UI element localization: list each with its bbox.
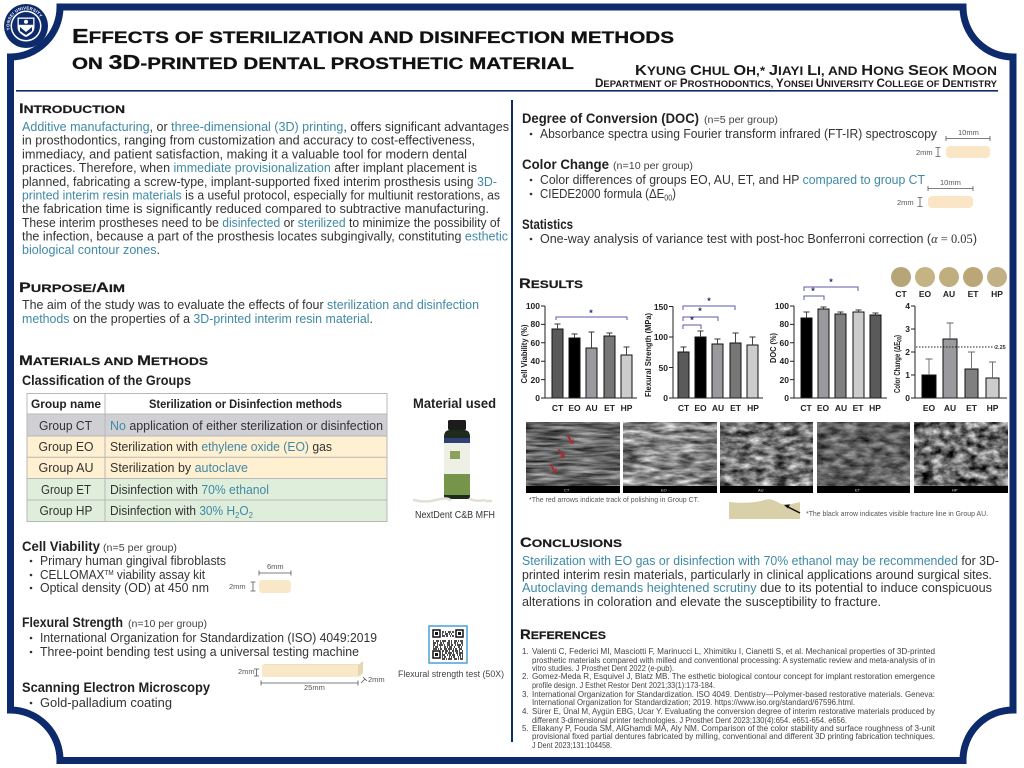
diagram: bar specimen 25mm: 2mm xyxy=(238,667,255,676)
text block: introduction: Additive manufacturing, or three-dimensional (3D) printing, offers significant advantages xyxy=(22,119,509,134)
bullet list: cell viability xyxy=(30,553,226,595)
bar chart: color change: EO xyxy=(923,403,936,413)
bullet list: flexural strength: Three-point bending test using a universal testing machine xyxy=(40,644,359,659)
text block: conclusions xyxy=(522,553,999,609)
panel: color change xyxy=(522,157,973,208)
SEM image: HP xyxy=(914,422,1008,493)
table: groups: Disinfection with 30% H xyxy=(110,503,238,518)
heading: DOC: Degree of Conversion (DOC) xyxy=(522,111,699,126)
sample size: cell viability: (n=5 per group) xyxy=(103,543,177,554)
reference list: Sürer E, Ünal M, Aygün EBG, Ucar Y. Evaluating the conversion degree of interim restorative materials produced by xyxy=(532,707,935,716)
bar chart: degree of conversion: * xyxy=(829,277,833,287)
bar chart: color change: 2 xyxy=(905,347,910,357)
diagram: disc specimen 10mm: 2mm xyxy=(897,198,914,207)
affiliation: DEPARTMENT OF PROSTHODONTICS, YONSEI UNIVERSITY COLLEGE OF DENTISTRY xyxy=(595,78,998,90)
logo: Yonsei University seal: YONSEI UNIVERSITY xyxy=(6,6,42,30)
bar chart: cell viability: AU xyxy=(585,403,598,413)
bar chart: degree of conversion: 60 xyxy=(780,338,789,348)
bar chart: cell viability xyxy=(519,301,637,413)
heading: purpose/aim: PURPOSE/ A IM xyxy=(19,280,125,295)
table: groups: Group AU xyxy=(38,460,94,475)
icon: resin bottle xyxy=(414,420,491,502)
reference list: 2. xyxy=(522,672,529,681)
bullet: SEM: Gold-palladium coating xyxy=(40,695,172,710)
bar chart: color change xyxy=(892,301,1007,413)
diagram: bar specimen 25mm: 25mm xyxy=(304,683,325,692)
bullet list: flexural strength xyxy=(30,630,377,659)
text block: conclusions: alterations in coloration and elevate the susceptibility to fracture. xyxy=(522,594,881,609)
SEM image: ET: ET xyxy=(855,488,861,492)
bar chart: flexural strength: 0 xyxy=(663,393,668,403)
bar chart: cell viability: HP xyxy=(621,403,633,413)
bar chart: flexural strength: HP xyxy=(747,403,759,413)
bar chart: color change: 00 xyxy=(898,337,904,342)
bar chart: degree of conversion: HP xyxy=(869,403,881,413)
bar chart: degree of conversion: 80 xyxy=(780,319,789,329)
color swatches: HP xyxy=(991,289,1003,299)
table: groups: No application of either sterilization or disinfection xyxy=(110,418,383,433)
bar chart: degree of conversion: * xyxy=(811,286,815,296)
bullet list: color change: CIEDE2000 formula (ΔE xyxy=(540,186,681,201)
bar chart: degree of conversion: ET xyxy=(853,403,864,413)
text block: introduction: in prosthodontics, ranging from customization and accuracy to cost-effectiveness, xyxy=(22,133,475,148)
bar chart: degree of conversion: 0 xyxy=(784,393,789,403)
text block: introduction: These interim prostheses need to be disinfected or sterilized to minimize the possibility of xyxy=(22,215,500,230)
bar chart: degree of conversion xyxy=(768,277,887,413)
bullet list: cell viability: CELLOMAX xyxy=(40,567,111,582)
bullet: statistics: One-way analysis of variance test with post-hoc Bonferroni correction (α = 0.05) xyxy=(540,231,977,246)
sample size: flexural strength: (n=10 per group) xyxy=(128,619,207,630)
reference list: provisional fixed partial dentures fabricated by milling, conventional and different 3D printing fabrication techniques. xyxy=(532,732,935,741)
table: groups: 2 xyxy=(235,510,240,520)
bar chart: flexural strength: AU xyxy=(712,403,724,413)
text block: introduction: planned, fabricating a screw-type, implant-supported fixed interim prosthesis using 3D- xyxy=(22,174,497,189)
bar chart: flexural strength: 50 xyxy=(659,363,668,373)
table: groups: Group CT xyxy=(39,418,92,433)
bar chart: cell viability: Cell Viability (%) xyxy=(519,324,529,384)
SEM image: CT xyxy=(526,422,620,493)
text block: introduction: immediacy, and patient satisfaction, making it a valuable tool for modern dental xyxy=(22,146,467,161)
bullet list: flexural strength: International Organization for Standardization (ISO) 4049:2019 xyxy=(40,630,377,645)
reference list: profile design. J Esthet Restor Dent 2021;33(1):173-184. xyxy=(532,681,715,690)
bar chart: color change: 0 xyxy=(905,393,910,403)
bar chart: flexural strength: EO xyxy=(694,403,707,413)
bar chart: flexural strength xyxy=(643,296,763,413)
SEM image: EO: EO xyxy=(661,488,667,492)
panel: references xyxy=(520,627,936,750)
bar chart: flexural strength: ET xyxy=(730,403,742,413)
bar chart: cell viability: EO xyxy=(568,403,581,413)
bar chart: flexural strength: 100 xyxy=(654,332,668,342)
heading: cell viability: Cell Viability xyxy=(22,539,100,554)
text block: purpose xyxy=(22,297,479,326)
reference list: J Dent 2023;131:104458. xyxy=(532,741,612,750)
title: ON 3D -PRINTED DENTAL PROSTHETIC MATERIAL xyxy=(72,51,574,74)
panel: statistics xyxy=(522,217,977,246)
bar chart: degree of conversion: 100 xyxy=(775,301,789,311)
reference list xyxy=(522,647,936,750)
heading: color change: Color Change xyxy=(522,157,609,172)
logo: Yonsei University seal xyxy=(4,4,48,48)
text block: conclusions: Sterilization with EO gas or disinfection with 70% ethanol may be recommended for 3D- xyxy=(522,553,999,568)
table: groups: Disinfection with 70% ethanol xyxy=(110,482,269,497)
text block: conclusions: printed interim resin materials, particularly in clinical applications around surgical sites. xyxy=(522,567,992,582)
diagram: bar specimen 25mm: 2mm xyxy=(368,675,385,684)
bar chart: flexural strength: * xyxy=(707,296,711,306)
subheading: classification: Classification of the Groups xyxy=(22,373,191,388)
bar chart: color change: 3 xyxy=(905,324,910,334)
reference list: vitro studies. J Prosthet Dent 2022 (e-pub). xyxy=(532,664,674,673)
bar chart: flexural strength: CT xyxy=(678,403,690,413)
bar chart: cell viability: 20 xyxy=(531,375,540,385)
text block: introduction xyxy=(22,119,509,257)
heading: statistics: Statistics xyxy=(522,217,573,232)
bar chart: color change: 2.25 xyxy=(995,345,1006,351)
bullet list: color change xyxy=(530,172,925,202)
table: groups: Group HP xyxy=(40,503,92,518)
bar chart: cell viability: 40 xyxy=(531,356,540,366)
diagram: disc specimen 6mm: 2mm xyxy=(229,582,246,591)
bar chart: cell viability: 80 xyxy=(531,319,540,329)
text block: purpose: The aim of the study was to evaluate the effects of four sterilization and disinfection xyxy=(22,297,479,312)
bar chart: cell viability: 100 xyxy=(526,301,540,311)
bullet list: cell viability: viability assay kit xyxy=(114,567,205,582)
reference list: International Organization for Standardization; 2019. https://www.iso.org/standard/67596.html. xyxy=(532,698,855,707)
table: groups: Sterilization or Disinfection methods xyxy=(149,397,342,411)
panel: purpose xyxy=(19,280,479,326)
SEM image: ET xyxy=(817,422,910,493)
reference list: 5. xyxy=(522,724,529,733)
table: groups: Group ET xyxy=(41,482,91,497)
bullet list: cell viability: Optical density (OD) at 450 nm xyxy=(40,580,209,595)
bar chart: color change: 4 xyxy=(905,301,910,311)
panel: flexural strength xyxy=(22,615,504,692)
text block: introduction: the infection, because a part of the prosthesis locates subgingivally, constituting esthetic xyxy=(22,228,508,244)
panel: scanning electron microscopy xyxy=(22,680,210,710)
bullet list: cell viability: Primary human gingival fibroblasts xyxy=(40,553,226,568)
text block: purpose: methods on the properties of a 3D-printed interim resin material. xyxy=(22,311,373,326)
diagram: disc specimen 10mm: 2mm xyxy=(916,148,933,157)
bar chart: flexural strength: 150 xyxy=(654,302,668,312)
bar chart: degree of conversion: DOC (%) xyxy=(768,333,778,363)
text block: introduction: practices. Therefore, when immediate provisionalization after implant placement is xyxy=(22,160,477,175)
bar chart: flexural strength: Flexural Strength (MPa) xyxy=(643,313,653,397)
bullet list: cell viability: TM xyxy=(104,570,114,577)
SEM image: EO xyxy=(623,422,717,493)
authors: KYUNG CHUL OH,* JIAYI LI, AND HONG SEOK MOON xyxy=(635,63,997,79)
reference list: Valenti C, Federici MI, Masciotti F, Marinucci L, Xhimitiku I, Cianetti S, et al. Mechanical properties of 3D-printed xyxy=(532,647,935,656)
table: groups: O xyxy=(239,503,249,518)
bar chart: color change: Color Change (ΔE xyxy=(892,320,902,393)
bar chart: degree of conversion: 20 xyxy=(780,375,789,385)
bar chart: flexural strength: * xyxy=(690,315,694,325)
heading: results: RESULTS xyxy=(519,276,584,291)
bar chart: color change: ) xyxy=(892,335,902,337)
bar chart: degree of conversion: 40 xyxy=(780,356,789,366)
icon: QR code xyxy=(429,626,467,663)
color swatches: EO xyxy=(919,289,932,299)
caption: black arrow: *The black arrow indicates visible fracture line in Group AU. xyxy=(806,509,988,518)
bar chart: color change: AU xyxy=(944,403,956,413)
title: EFFECTS OF STERILIZATION AND DISINFECTION METHODS xyxy=(72,25,674,48)
diagram: disc specimen 6mm xyxy=(229,562,291,593)
reference list: Ellakany P, Fouda SM, AlGhamdi MA, Aly NM. Comparison of the color stability and surface roughness of 3-unit xyxy=(532,724,936,733)
diagram: disc specimen 10mm xyxy=(916,128,990,158)
bullet: DOC: Absorbance spectra using Fourier transform infrared (FT-IR) spectroscopy xyxy=(540,126,937,141)
bullet list: color change: Color differences of groups EO, AU, ET, and HP compared to group CT xyxy=(540,172,925,187)
bar chart: color change: 1 xyxy=(905,370,910,380)
bar chart: cell viability: 60 xyxy=(531,338,540,348)
diagram: disc specimen 10mm: 10mm xyxy=(940,178,961,187)
bullet list: color change: 00 xyxy=(664,194,673,202)
heading: flexural strength: Flexural Strength xyxy=(22,615,123,630)
text block: introduction: biological contour zones. xyxy=(22,242,160,257)
heading: SEM: Scanning Electron Microscopy xyxy=(22,680,210,695)
panel: cell viability xyxy=(22,539,291,595)
bar chart: cell viability: ET xyxy=(604,403,616,413)
color swatches: AU xyxy=(943,289,955,299)
reference list: different 3-dimensional printer technologies. J Prosthet Dent 2023;130(4):654. e651-654. e656. xyxy=(532,716,847,725)
caption: red arrows: *The red arrows indicate track of polishing in Group CT. xyxy=(529,495,699,504)
caption: QR code: Flexural strength test (50X) xyxy=(398,669,504,679)
title xyxy=(72,25,674,74)
reference list: 1. xyxy=(522,647,529,656)
bar chart: degree of conversion: AU xyxy=(835,403,847,413)
table: groups xyxy=(27,393,387,522)
diagram: bar specimen 25mm xyxy=(238,661,385,692)
table: groups: Sterilization by autoclave xyxy=(110,460,248,475)
SEM image: CT: CT xyxy=(564,488,570,492)
heading: introduction: INTRODUCTION xyxy=(19,101,125,116)
diagram: disc specimen 6mm: 6mm xyxy=(267,562,284,571)
fracture specimen with arrow xyxy=(729,499,800,519)
bullet list: color change: ) xyxy=(672,186,676,201)
bar chart: color change: ET xyxy=(966,403,978,413)
sample size: color change: (n=10 per group) xyxy=(613,161,693,172)
bar chart: color change: HP xyxy=(987,403,999,413)
table: groups: Group EO xyxy=(38,439,94,454)
icon: red arrows xyxy=(551,436,573,472)
SEM image: AU: AU xyxy=(758,488,764,492)
reference list: 3. xyxy=(522,690,529,699)
panel: degree of conversion xyxy=(522,111,990,158)
sample size: DOC: (n=5 per group) xyxy=(704,115,778,126)
text block: introduction: printed interim resin materials is a useful protocol, especially for multiunit restorations, as xyxy=(22,187,500,202)
reference list: International Organization for Standardization. ISO 4049. Dentistry—Polymer-based restorative materials. Geneva: xyxy=(532,690,935,699)
text block: conclusions: Autoclaving demands heightened scrutiny due to its potential to induce conspicuous xyxy=(522,580,992,595)
panel: conclusions xyxy=(520,535,999,609)
panel: material used xyxy=(413,396,496,521)
SEM image: HP: HP xyxy=(952,488,958,492)
heading: conclusions: CONCLUSIONS xyxy=(520,535,623,550)
text block: introduction: the fabrication time is significantly reduced compared to subtractive manufacturing. xyxy=(22,201,489,216)
color swatches: ET xyxy=(968,289,979,299)
reference list: 4. xyxy=(522,707,529,716)
table: groups: 2 xyxy=(249,510,253,520)
SEM image: AU xyxy=(720,422,813,493)
color swatches xyxy=(891,267,1007,299)
bar chart: degree of conversion: CT xyxy=(800,403,812,413)
reference list: prosthetic materials compared with milled and conventional processing: A systematic review and meta-analysis of in xyxy=(532,656,935,665)
table: groups: Sterilization with ethylene oxide (EO) gas xyxy=(110,439,332,454)
table: groups: Group name xyxy=(31,397,101,411)
bar chart: flexural strength: * xyxy=(698,306,702,316)
caption: material name: NextDent C&B MFH xyxy=(415,510,495,521)
bar chart: cell viability: 0 xyxy=(535,393,540,403)
heading: materials and methods: MATERIALS AND METHODS xyxy=(19,353,209,368)
diagram: disc specimen 10mm: 10mm xyxy=(958,128,979,137)
heading: material used: Material used xyxy=(413,396,496,411)
panel: introduction xyxy=(19,101,509,257)
reference list: Gomez-Meda R, Esquivel J, Blatz MB. The esthetic biological contour concept for implant restoration emergence xyxy=(532,672,936,681)
color swatches: CT xyxy=(895,289,907,299)
bar chart: cell viability: * xyxy=(589,308,593,318)
heading: references: REFERENCES xyxy=(520,627,607,642)
diagram: disc specimen 10mm xyxy=(897,178,973,208)
bar chart: degree of conversion: EO xyxy=(817,403,830,413)
bar chart: cell viability: CT xyxy=(552,403,564,413)
